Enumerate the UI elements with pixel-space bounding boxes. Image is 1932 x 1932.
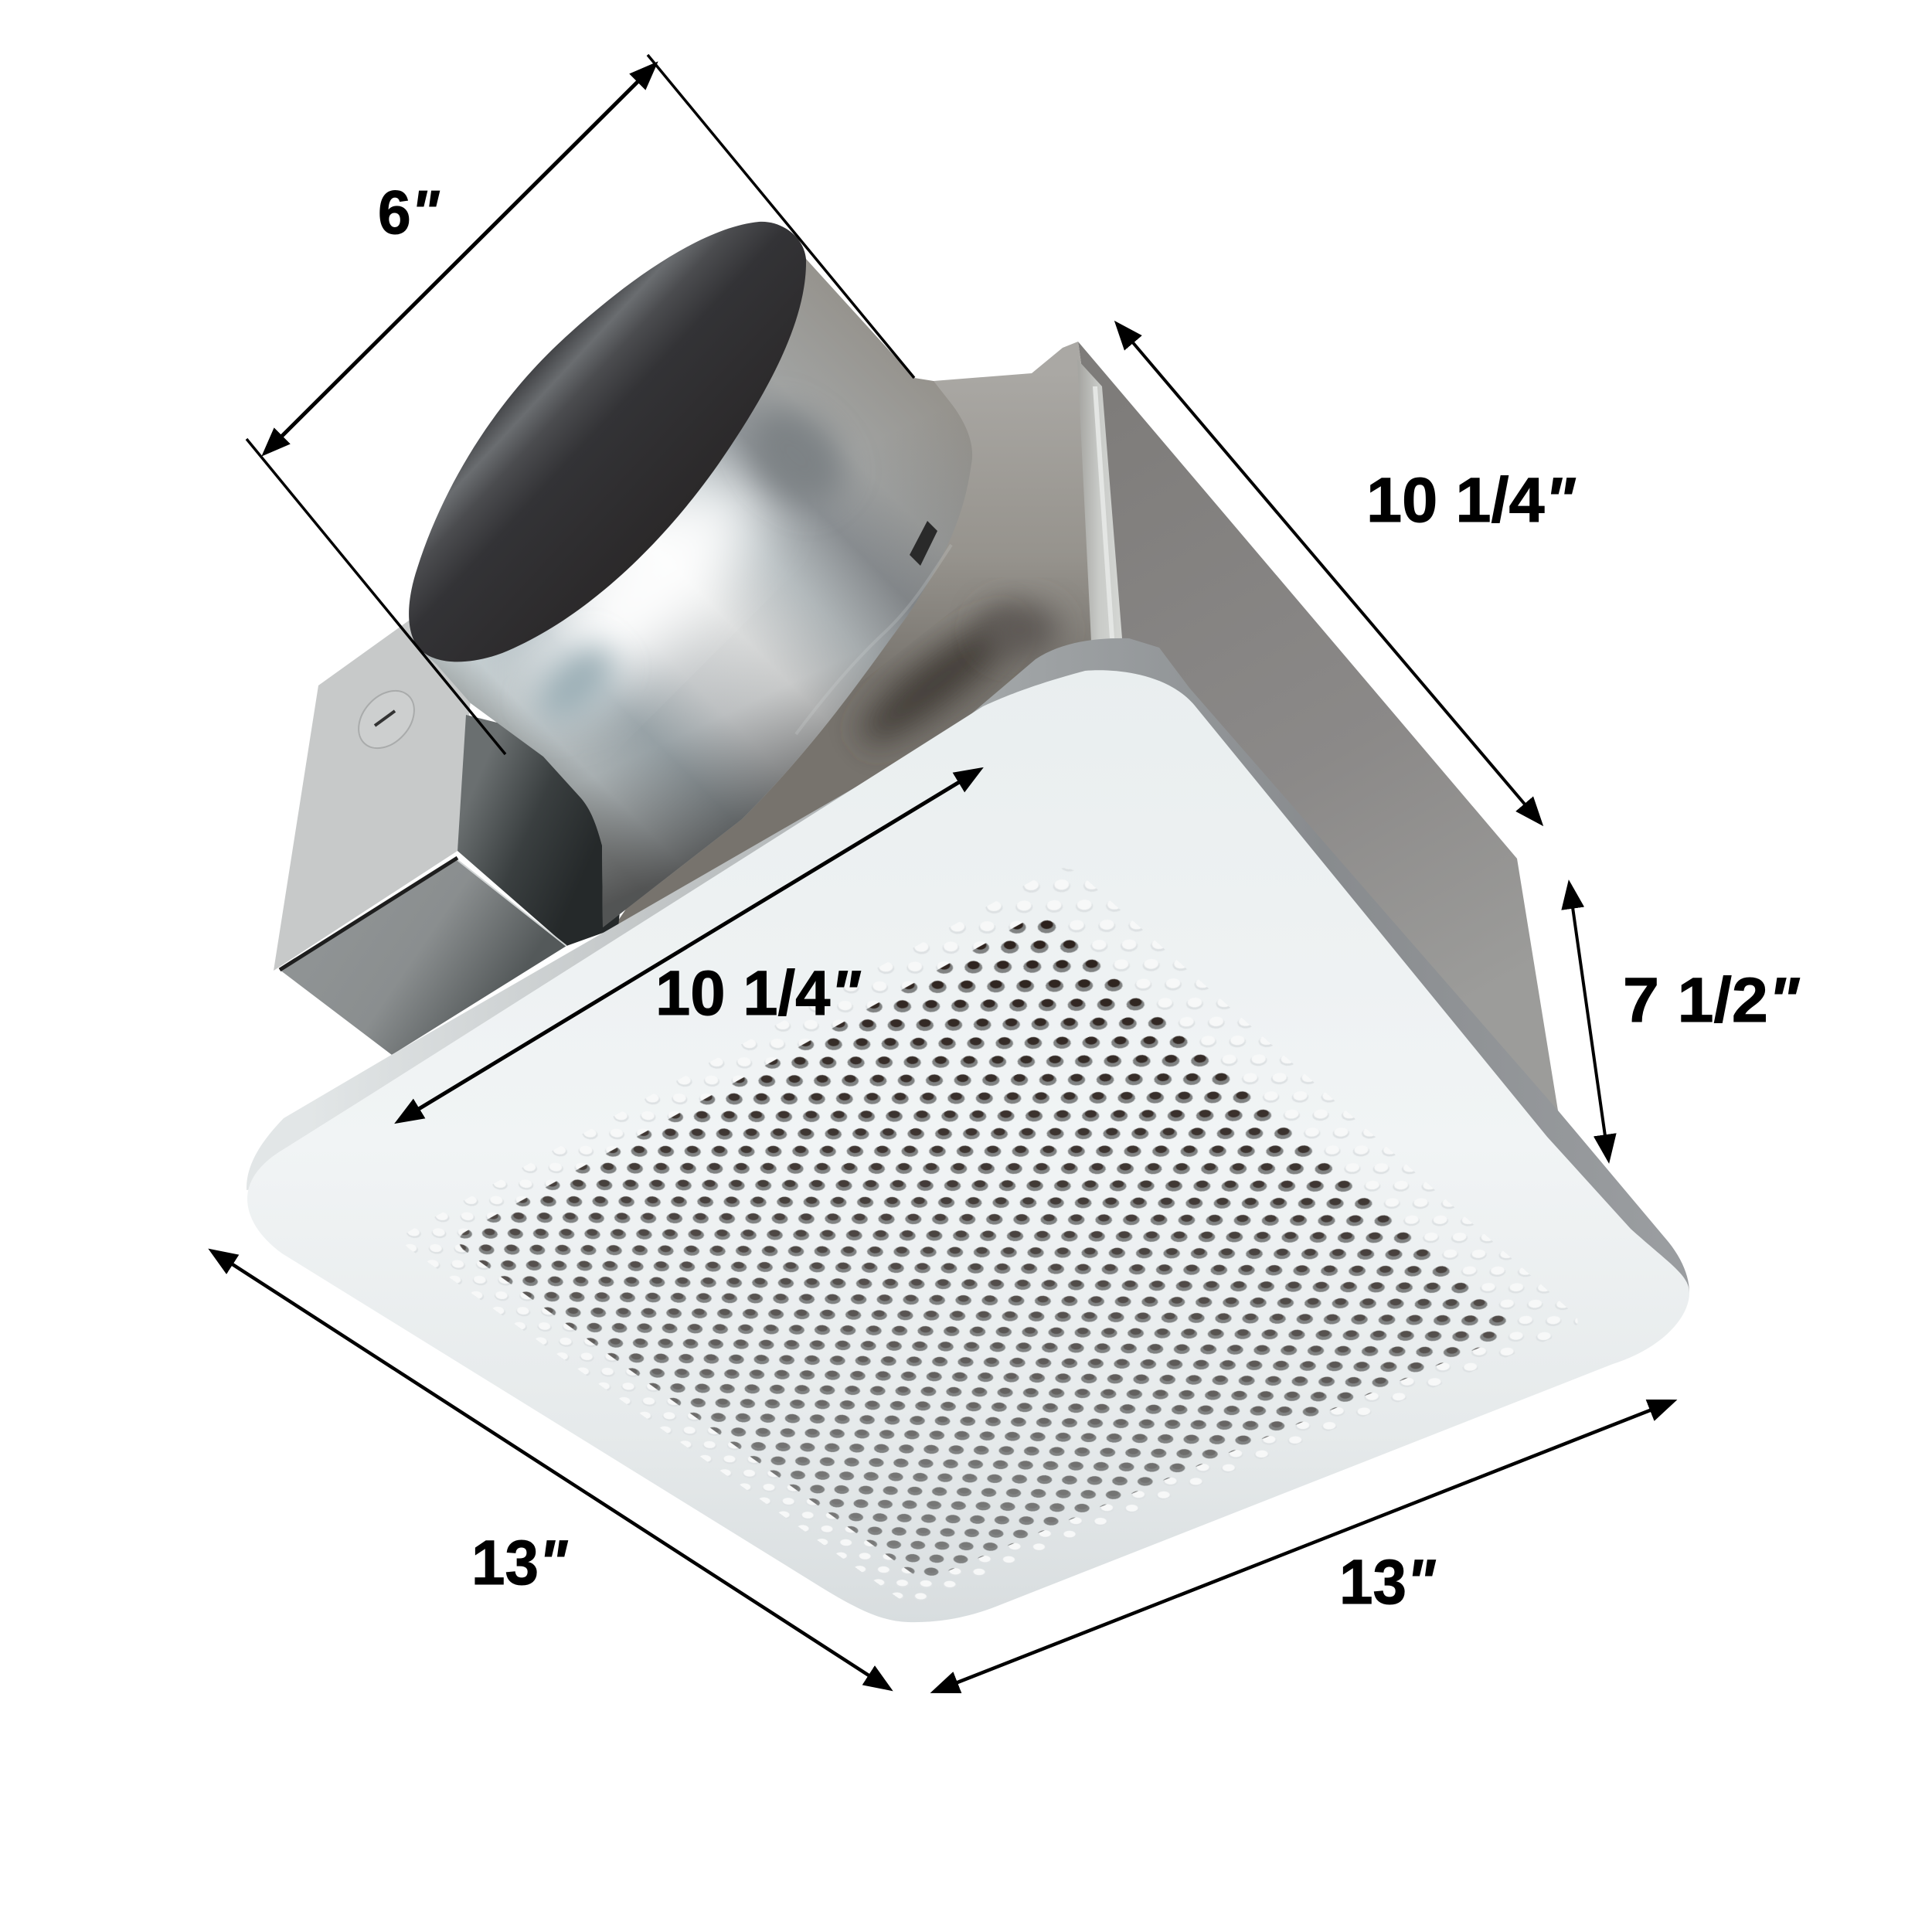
grille face <box>247 670 1689 1622</box>
round duct collar <box>424 259 972 927</box>
label: grille depth: 13" <box>471 1528 568 1598</box>
label: grille width: 13" <box>1339 1547 1436 1617</box>
label: housing width: 10 1/4" <box>655 958 861 1029</box>
grille side edge <box>247 638 1689 1293</box>
junction box <box>274 621 626 1055</box>
housing side panel <box>1078 342 1569 1128</box>
label: housing length: 10 1/4" <box>1366 465 1576 536</box>
duct opening <box>409 222 806 662</box>
holes <box>450 910 1523 1581</box>
arrow: duct diameter <box>266 66 654 452</box>
grille perforations <box>406 869 1578 1600</box>
dimple ring <box>396 862 1586 1606</box>
arrow: housing height <box>1570 886 1608 1158</box>
arrow: grille depth <box>213 1252 888 1688</box>
housing back panel <box>603 342 1122 943</box>
label: 6 inch: 6" <box>378 178 440 247</box>
arrow: housing length <box>1118 325 1539 821</box>
label: housing height: 7 1/2" <box>1623 965 1800 1036</box>
hole shadows <box>450 910 1523 1581</box>
arrow: grille width <box>936 1402 1672 1691</box>
arrow: housing width <box>400 770 978 1121</box>
extension lines for duct diameter <box>247 55 914 754</box>
product photo: ventilation fan <box>247 221 1689 1623</box>
